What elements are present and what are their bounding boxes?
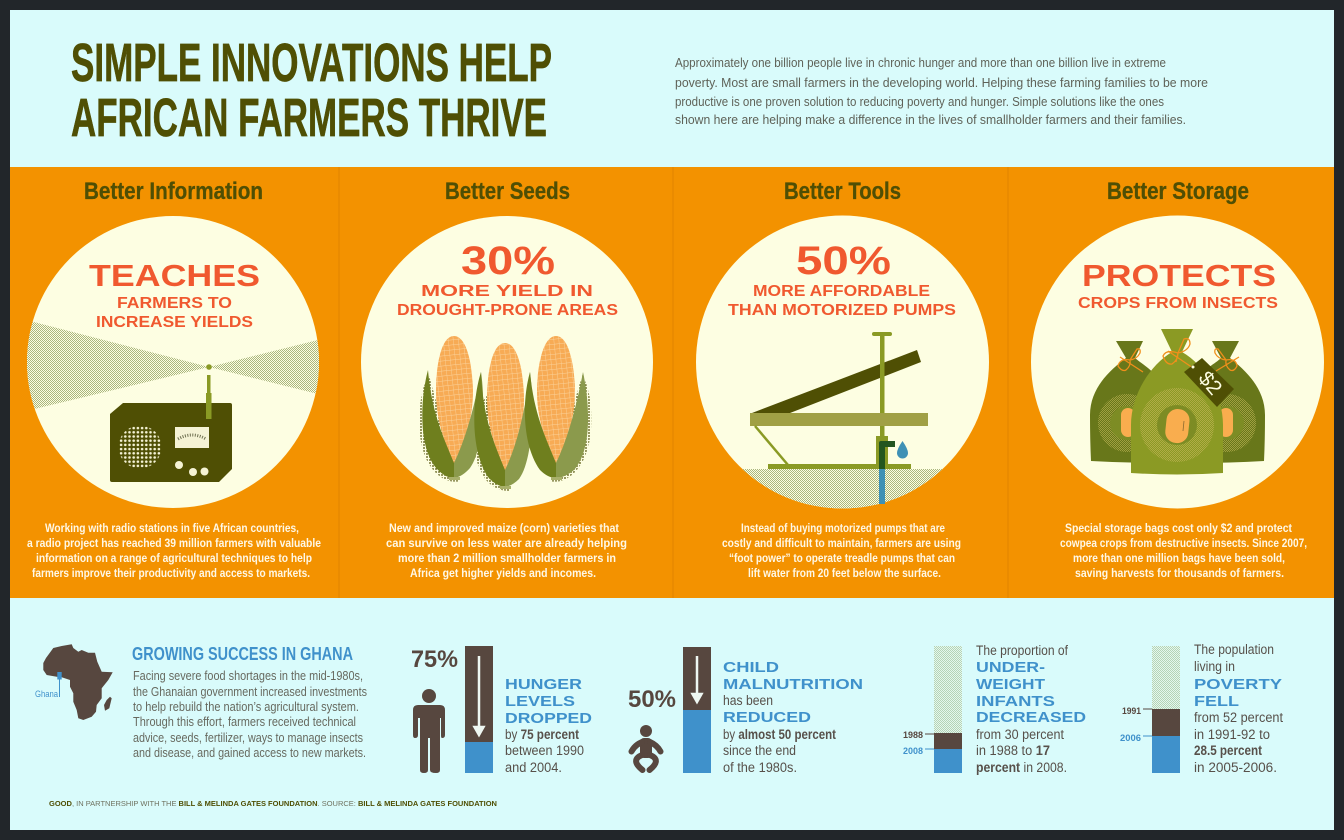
ground [740, 469, 945, 511]
text: child malnutrition: since the end [723, 743, 796, 758]
panel: better tools [696, 178, 989, 580]
text: ghana: to help rebuild the nation’s agricultural system. [133, 699, 359, 714]
intro text: Approximately one billion people live in chronic hunger and more than one billion live in extreme [675, 55, 1166, 70]
bar: underweight: 2008 [903, 746, 923, 756]
circle: storage [1031, 216, 1324, 508]
intro text: shown here are helping make a difference in the lives of smallholder farmers and their families. [675, 112, 1186, 127]
callout: 50 percent: 50% [796, 239, 891, 283]
text: poverty: 28.5 percent [1194, 743, 1262, 758]
text: underweight: DECREASED [976, 710, 1086, 726]
callout: teaches: TEACHES [89, 258, 260, 293]
radio waves [26, 320, 322, 411]
text: hunger [505, 677, 592, 775]
text: tools: lift water from 20 feet below the surface. [748, 568, 941, 580]
callout: 30 percent: DROUGHT-PRONE AREAS [397, 302, 618, 319]
text: child malnutrition: REDUCED [723, 710, 811, 726]
icon: adult [413, 689, 445, 773]
text: child malnutrition: CHILD [723, 660, 779, 676]
text: poverty: POVERTY [1194, 677, 1282, 693]
text: child malnutrition: has been [723, 693, 773, 708]
number: 75 percent: 75% [411, 646, 458, 673]
heading: better seeds: Better Seeds [445, 178, 570, 205]
icon: africa map [35, 644, 113, 720]
callout: protects: CROPS FROM INSECTS [1078, 295, 1278, 312]
text: storage [1060, 523, 1307, 580]
text: ghana: advice, seeds, fertilizer, ways to manage insects [133, 730, 363, 745]
text: underweight: UNDER- [976, 660, 1045, 676]
panel: ghana [35, 644, 367, 760]
panel: better information [26, 178, 322, 580]
text: child malnutrition: by almost 50 percent [723, 727, 836, 742]
number: 50 percent: 50% [628, 686, 676, 713]
panel: better seeds [361, 178, 653, 580]
icon: treadle pump [750, 332, 928, 504]
text: storage: more than one million bags have been sold, [1073, 553, 1285, 565]
callout: teaches: INCREASE YIELDS [96, 314, 253, 331]
icon: africa map: Ghana [35, 689, 59, 700]
callout: teaches: FARMERS TO [117, 295, 232, 312]
callout: 30 percent: 30% [461, 239, 555, 283]
callout: 50 percent [728, 239, 956, 319]
text: hunger: DROPPED [505, 711, 592, 727]
stat: underweight infants [903, 643, 1086, 775]
text: tools: costly and difficult to maintain, farmers are using [722, 538, 961, 550]
text: information: a radio project has reached 39 million farmers with valuable [27, 538, 321, 550]
circle: tools [696, 216, 989, 508]
text: hunger: LEVELS [505, 694, 575, 710]
stat: child malnutrition [628, 647, 863, 775]
bar: hunger [465, 646, 493, 773]
intro text: poverty. Most are small farmers in the developing world. Helping these farming families to be more [675, 75, 1208, 90]
footer credit: GOOD, IN PARTNERSHIP WITH THE BILL & MELINDA GATES FOUNDATION. SOURCE: BILL & MELINDA GATES FOUNDATION [49, 799, 497, 808]
icon: baby [632, 725, 660, 770]
text: ghana: Through this effort, farmers received technical [133, 714, 356, 729]
text: hunger: between 1990 [505, 743, 584, 758]
text: ghana [133, 668, 367, 760]
text: poverty: The population [1194, 642, 1274, 657]
callout: 50 percent: THAN MOTORIZED PUMPS [728, 302, 956, 319]
heading: better storage: Better Storage [1107, 178, 1249, 205]
intro text: productive is one proven solution to reducing poverty and hunger. Simple solutions like the ones [675, 94, 1164, 109]
text: underweight: from 30 percent [976, 727, 1064, 742]
text: storage: Special storage bags cost only $2 and protect [1065, 523, 1292, 535]
text: poverty: living in [1194, 659, 1235, 674]
text: seeds: can survive on less water are already helping [386, 538, 627, 550]
text: ghana: and disease, and gained access to new markets. [133, 745, 366, 760]
text: underweight: The proportion of [976, 643, 1068, 658]
panel: orange band [10, 167, 1334, 598]
text: poverty [1194, 642, 1283, 775]
stat: poverty [1120, 642, 1283, 775]
circle: information [27, 216, 319, 508]
icon: radio [110, 364, 232, 482]
right bag [1195, 341, 1265, 463]
bar: child malnutrition [683, 647, 711, 773]
text: child malnutrition: MALNUTRITION [723, 677, 863, 693]
stat: hunger [411, 646, 592, 775]
text: hunger: by 75 percent [505, 727, 579, 742]
heading: better tools: Better Tools [784, 178, 901, 205]
text: underweight: INFANTS [976, 694, 1055, 710]
price tag [1184, 358, 1234, 407]
text: child malnutrition: of the 1980s. [723, 760, 797, 775]
text: seeds: Africa get higher yields and incomes. [410, 568, 596, 580]
text: poverty: FELL [1194, 694, 1239, 710]
text: underweight: WEIGHT [976, 677, 1045, 693]
callout: protects: PROTECTS [1082, 258, 1276, 293]
callout: teaches [89, 258, 260, 331]
bar: poverty: 2006 [1120, 733, 1141, 743]
heading: better information: Better Information [84, 178, 263, 205]
bar: poverty [1120, 646, 1180, 773]
icon: storage bags [1090, 329, 1265, 474]
callout: 30 percent: MORE YIELD IN [421, 283, 593, 300]
title: AFRICAN FARMERS THRIVE [71, 88, 547, 148]
circle: seeds [361, 216, 653, 508]
heading: ghana: GROWING SUCCESS IN GHANA [132, 644, 353, 664]
text: information: Working with radio stations in five African countries, [45, 523, 299, 535]
text: poverty: in 2005-2006. [1194, 760, 1277, 775]
text: underweight: percent in 2008. [976, 760, 1067, 775]
bar: underweight: 1988 [903, 730, 923, 740]
bar: poverty: 1991 [1122, 706, 1141, 716]
text: ghana: Facing severe food shortages in the mid-1980s, [133, 668, 363, 683]
text: information: farmers improve their productivity and access to markets. [32, 568, 310, 580]
panel: footer background [10, 598, 1334, 830]
text: seeds: more than 2 million smallholder farmers in [398, 553, 616, 565]
left bag [1090, 341, 1160, 463]
text: storage: cowpea crops from destructive insects. Since 2007, [1060, 538, 1307, 550]
text: child malnutrition [723, 660, 863, 775]
panel: better storage [1031, 178, 1324, 580]
text: seeds [386, 523, 627, 580]
callout: 50 percent: MORE AFFORDABLE [753, 283, 930, 300]
title [71, 33, 552, 148]
icon: corn [422, 336, 588, 489]
text: seeds: New and improved maize (corn) varieties that [389, 523, 619, 535]
center bag [1131, 329, 1223, 474]
bar: underweight [903, 646, 962, 773]
ties [1118, 339, 1239, 372]
text: ghana: the Ghanaian government increased investments [133, 684, 367, 699]
text: underweight [976, 643, 1086, 775]
text: underweight: in 1988 to 17 [976, 743, 1050, 758]
text: poverty: in 1991-92 to [1194, 727, 1270, 742]
price tag: $2 [1194, 367, 1226, 400]
text: hunger: and 2004. [505, 760, 562, 775]
text: information [27, 523, 321, 580]
callout: protects [1078, 258, 1278, 312]
panel: header background [10, 10, 1334, 167]
text: hunger: HUNGER [505, 677, 583, 693]
callout: 30 percent [397, 239, 618, 319]
text: poverty: from 52 percent [1194, 710, 1283, 725]
text: storage: saving harvests for thousands of farmers. [1075, 568, 1284, 580]
title: SIMPLE INNOVATIONS HELP [71, 33, 552, 93]
text: tools: “foot power” to operate treadle pumps that can [729, 553, 955, 565]
intro text [675, 55, 1208, 127]
text: tools [722, 523, 961, 580]
text: tools: Instead of buying motorized pumps that are [741, 523, 945, 535]
text: information: information on a range of agricultural techniques to help [36, 553, 312, 565]
